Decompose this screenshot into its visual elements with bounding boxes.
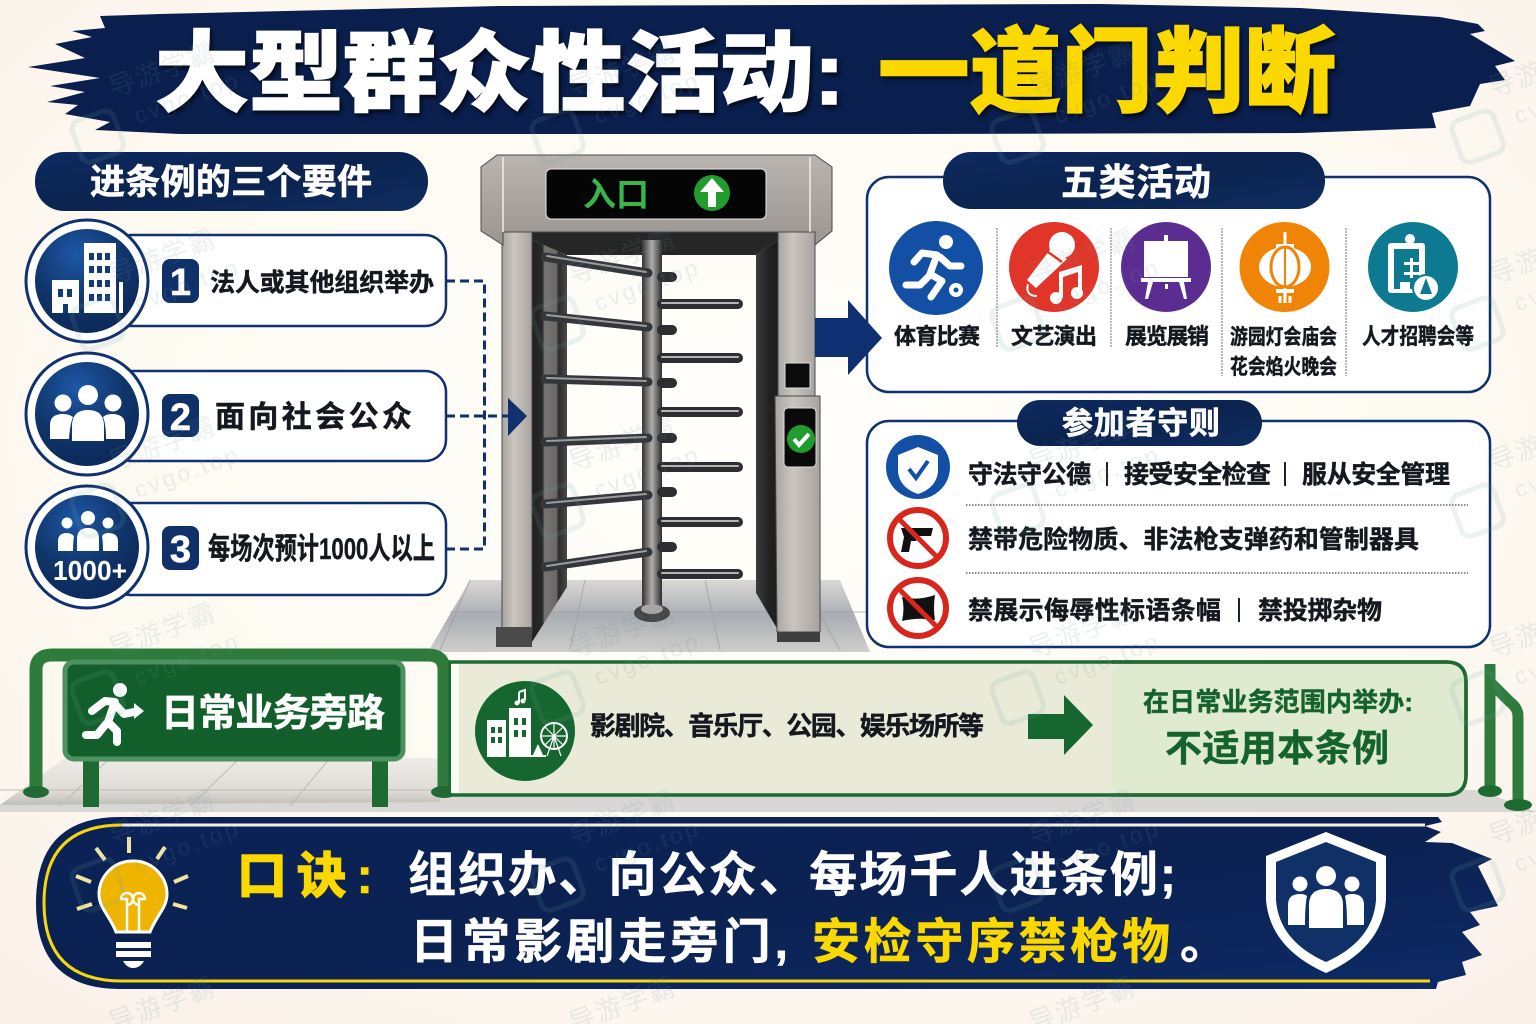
watermarks: cvgo.top [131, 440, 244, 503]
conclusion text: 不适用本条例 [1165, 728, 1389, 769]
icon: green up arrow [694, 175, 730, 211]
icon: people group [50, 385, 125, 441]
gate floor [428, 580, 870, 652]
watermarks: cvgo.top [1051, 814, 1164, 877]
rule row 1: 服从安全管理 [1302, 461, 1450, 489]
icon: venue buildings [475, 681, 575, 781]
watermarks: cvgo.top [591, 440, 704, 503]
activity: job fair: 人才招聘会等 [1362, 324, 1474, 349]
watermarks: 导游学霸 [105, 597, 220, 664]
panel: daily business venues [450, 662, 1466, 795]
watermarks: 导游学霸 [1025, 223, 1140, 290]
number badge 2: 2 [170, 397, 191, 439]
watermarks: 导游学霸 [1025, 597, 1140, 664]
turnstile gate [428, 155, 870, 652]
card text 3: 每场次预计1000人以上 [208, 533, 435, 566]
conclusion text: 在日常业务范围内举办: [1143, 687, 1413, 717]
watermarks: cvgo.top [591, 627, 704, 690]
icon: shield with people [1266, 832, 1386, 973]
requirement card 1 [26, 220, 446, 342]
dashed connector lines [446, 281, 510, 549]
side-road sign: 日常业务旁路 [161, 693, 385, 735]
watermarks: cvgo.top [131, 253, 244, 316]
brush stroke background [28, 4, 1515, 134]
row dividers [966, 505, 1468, 573]
rule row 1 [886, 435, 1450, 499]
watermarks: cvgo.top [591, 253, 704, 316]
center post [634, 240, 670, 622]
watermarks: 导游学霸 [1025, 410, 1140, 477]
floor behind green sign [0, 758, 1536, 812]
card text 1: 法人或其他组织举办 [210, 269, 434, 297]
icon: crowd 1000+: 1000+ [53, 555, 127, 586]
watermarks: cvgo.top [1051, 440, 1164, 503]
side-road sign [65, 662, 403, 759]
green side-road section [23, 655, 1532, 811]
heading pill [35, 152, 428, 211]
card text 2: 面向社会公众 [215, 401, 412, 434]
watermarks: cvgo.top [131, 627, 244, 690]
heading pill: 进条例的三个要件 [90, 163, 372, 202]
watermarks: 导游学霸 [105, 223, 220, 290]
watermarks: 导游学霸 [1025, 36, 1140, 103]
activity: exhibition: 展览展销 [1125, 324, 1209, 349]
right guard rail [1478, 664, 1532, 811]
watermarks: cvgo.top [1051, 66, 1164, 129]
rule row 2: 禁带危险物质、非法枪支弹药和管制器具 [968, 525, 1419, 554]
top inner shadow [532, 230, 778, 255]
green arrow [1028, 695, 1093, 755]
mnemonic banner [36, 817, 1498, 989]
number badge 1: 1 [170, 262, 191, 304]
icon: buildings [52, 243, 123, 313]
activity: lantern [1230, 222, 1337, 379]
number badge 2 [162, 394, 199, 439]
watermarks: cvgo.top [1051, 627, 1164, 690]
heading pill: 五类活动 [1061, 162, 1211, 203]
turnstile left arms [545, 256, 648, 567]
watermarks: 导游学霸 [105, 410, 220, 477]
icon: green check [787, 425, 815, 453]
requirement card 3 [26, 486, 446, 608]
arrow from gate to activities [815, 300, 882, 375]
icon: running person [86, 683, 144, 742]
sign posts [83, 758, 388, 807]
title yellow part: 一道门判断 [878, 22, 1336, 124]
column dividers [997, 228, 1346, 376]
inner left frame [532, 240, 567, 642]
watermarks: cvgo.top [591, 814, 704, 877]
watermarks: cvgo.top [131, 814, 244, 877]
connector arrow head [508, 398, 527, 436]
panel: five activity types [815, 152, 1490, 392]
rule row 3: 禁投掷杂物 [1258, 597, 1382, 625]
icon: no banners [890, 580, 946, 636]
left pillar [496, 232, 532, 647]
activity: sports [889, 221, 983, 349]
mnemonic line 2 [410, 916, 1228, 969]
left section: three requirements [26, 152, 446, 608]
turnstile right arms [662, 277, 738, 574]
icon: crowd 1000+ [53, 511, 127, 586]
mnemonic line 2: 日常影剧走旁门, [410, 916, 788, 969]
panel: participant rules [867, 400, 1490, 647]
gate header [481, 155, 832, 245]
watermarks: 导游学霸 [565, 784, 680, 851]
activity: sports: 体育比赛 [894, 324, 980, 349]
right pillar [778, 232, 815, 402]
activity: performing arts [1009, 222, 1099, 349]
rule row 1: 守法守公德 [968, 461, 1091, 489]
heading pill: 参加者守则 [1062, 406, 1220, 441]
ticket console [775, 363, 820, 642]
heading pill [943, 152, 1325, 209]
watermarks: cvgo.top [131, 66, 244, 129]
banner background [36, 817, 1498, 989]
activity: exhibition [1121, 222, 1211, 349]
icon: shield check [886, 435, 950, 499]
rule row 3 [890, 580, 1382, 636]
inner right frame [756, 240, 778, 630]
number badge 3: 3 [170, 529, 191, 571]
mnemonic line 2: 安检守序禁枪物 [812, 916, 1170, 969]
requirement card 2 [26, 353, 446, 475]
title banner [28, 4, 1515, 134]
watermarks: 导游学霸 [565, 597, 680, 664]
watermarks: cvgo.top [591, 66, 704, 129]
watermarks: 导游学霸 [565, 223, 680, 290]
guard rail frame [36, 655, 444, 790]
heading pill [1017, 400, 1262, 446]
rule row 2 [890, 510, 1419, 566]
entrance sign: 入口 [583, 176, 649, 213]
watermarks: 导游学霸 [105, 36, 220, 103]
activity: job fair [1362, 222, 1474, 349]
banner inner line [44, 825, 1430, 981]
activity: lantern: 游园灯会庙会 [1230, 326, 1337, 349]
rule row 1: 接受安全检查 [1124, 461, 1271, 489]
title white part: 大型群众性活动: [155, 24, 845, 123]
watermarks: 导游学霸 [1025, 784, 1140, 851]
icon: no weapons [890, 510, 946, 566]
watermarks: 导游学霸 [565, 410, 680, 477]
watermarks: 导游学霸 [565, 36, 680, 103]
mnemonic label: 口诀: [237, 848, 373, 904]
rail feet [23, 786, 457, 798]
icon: light bulb [76, 837, 188, 968]
venues text: 影剧院、音乐厅、公园、娱乐场所等 [590, 711, 984, 741]
activity: performing arts: 文艺演出 [1011, 324, 1097, 349]
rule row 3: 禁展示侮辱性标语条幅 [968, 597, 1221, 625]
number badge 1 [162, 259, 199, 304]
watermarks: 导游学霸 [105, 784, 220, 851]
watermarks: cvgo.top [1051, 253, 1164, 316]
mnemonic line 2: 。 [1180, 916, 1228, 969]
number badge 3 [162, 526, 199, 571]
mnemonic line 1: 组织办、向公众、每场千人进条例; [408, 849, 1176, 902]
entrance sign [546, 169, 766, 219]
activity: lantern: 花会焰火晚会 [1230, 356, 1337, 379]
conclusion text [1143, 687, 1413, 769]
